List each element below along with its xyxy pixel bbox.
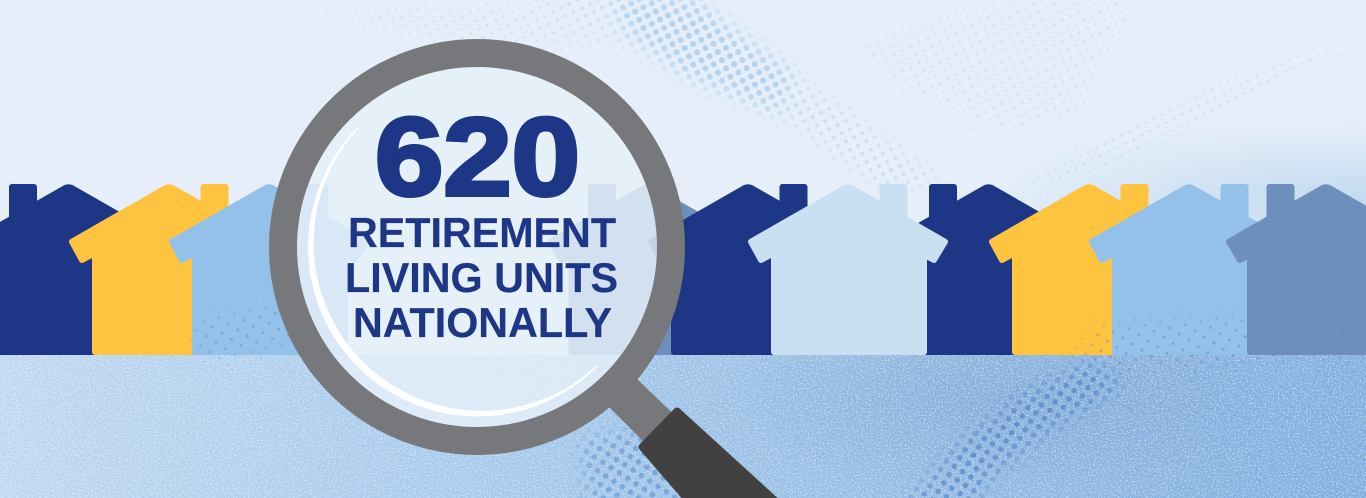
house: yellow right <box>992 187 1186 352</box>
house: light blue right <box>1092 187 1286 352</box>
halftone dots: ground and house bases <box>185 306 1364 498</box>
house: navy left <box>0 187 166 352</box>
row of houses: left group <box>0 187 366 352</box>
house: steel blue behind lens <box>550 187 744 352</box>
house: pale blue centre <box>751 187 945 352</box>
house: yellow left <box>72 187 266 352</box>
halftone dots: sky <box>130 0 1340 192</box>
lens glass <box>296 66 658 428</box>
lens ring <box>283 53 671 441</box>
label line 2: LIVING UNITS <box>345 254 618 301</box>
big number: 620 <box>375 96 580 219</box>
headline text <box>345 96 618 346</box>
magnifying glass <box>283 53 790 498</box>
house: light blue left <box>172 187 366 352</box>
sky background <box>0 0 1366 360</box>
house: navy right <box>892 187 1086 352</box>
label line 1: RETIREMENT <box>348 209 616 256</box>
label line 3: NATIONALLY <box>353 299 612 346</box>
textured ground <box>0 355 1366 498</box>
house: navy centre <box>651 187 845 352</box>
handle neck <box>609 379 682 450</box>
row of houses: right group <box>550 187 1366 352</box>
handle grip <box>642 411 790 498</box>
house: steel blue right <box>1229 187 1366 352</box>
lens highlight <box>309 128 597 416</box>
